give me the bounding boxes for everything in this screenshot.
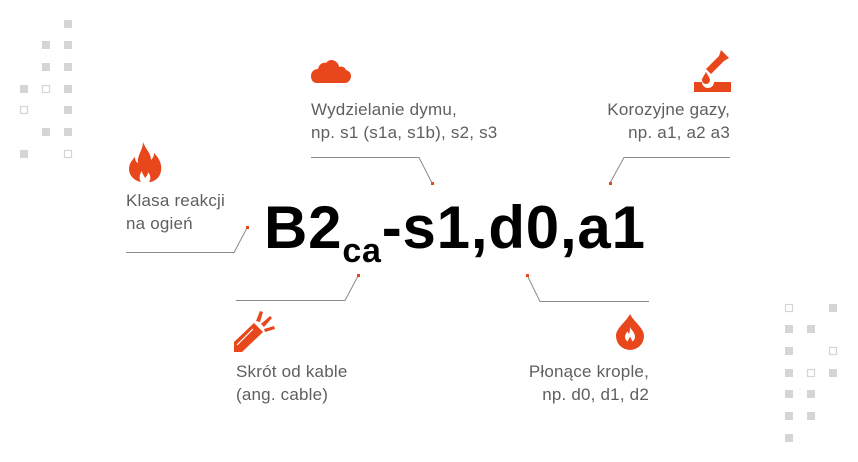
text: Klasa reakcji: Klasa reakcji [126, 191, 225, 210]
text: Płonące krople: np. d0, d1, d2 [542, 385, 649, 404]
text: Korozyjne gazy [607, 100, 730, 142]
icon: flame drop [616, 314, 644, 350]
text: Klasa reakcji [126, 191, 225, 233]
text: Wydzielanie dymu: np. s1 (s1a, s1b), s2, s3 [311, 123, 497, 142]
text: Płonące krople [529, 362, 649, 404]
main code: B2ca-s1,d0,a1 [264, 194, 646, 270]
text: Skrót od kable: (ang. cable) [236, 385, 328, 404]
text: Skrót od kable [236, 362, 347, 404]
text: Wydzielanie dymu: Wydzielanie dymu, [311, 100, 457, 119]
text: Wydzielanie dymu [311, 100, 497, 142]
icon: cable [234, 311, 275, 352]
text: Korozyjne gazy: Korozyjne gazy, [607, 100, 730, 119]
icon: dropper [694, 50, 731, 92]
text: Klasa reakcji: na ogień [126, 214, 193, 233]
icon: fire [129, 142, 162, 182]
text: Płonące krople: Płonące krople, [529, 362, 649, 381]
text: Korozyjne gazy: np. a1, a2 a3 [628, 123, 730, 142]
icon: cloud [311, 60, 351, 83]
text: Skrót od kable: Skrót od kable [236, 362, 347, 381]
